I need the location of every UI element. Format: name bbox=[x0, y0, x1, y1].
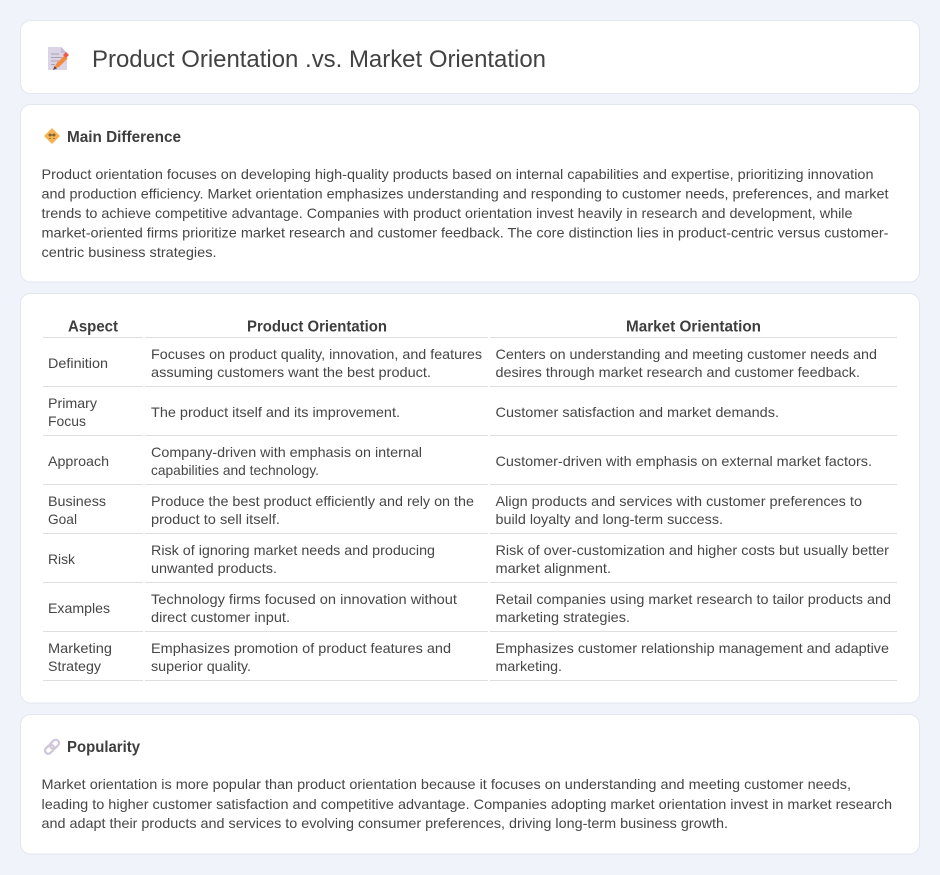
table row: marketing strategy: superior quality. bbox=[151, 658, 251, 674]
table row: risk: unwanted products. bbox=[151, 560, 277, 576]
text block: popularity: leading to higher customer satisfaction and competitive advantage. Companies adopting market orientation invest in market research bbox=[42, 796, 892, 812]
panel: title header bbox=[20, 20, 920, 94]
table row: business goal: product to sell itself. bbox=[151, 511, 280, 527]
table row: risk: Risk bbox=[48, 551, 76, 567]
text block: main difference: centric business strategies. bbox=[42, 244, 216, 260]
table row: examples: marketing strategies. bbox=[496, 609, 630, 625]
heading: main difference: Main Difference bbox=[67, 129, 181, 146]
table row: examples bbox=[43, 591, 897, 632]
table row: marketing strategy bbox=[43, 640, 897, 681]
text block: main difference bbox=[42, 166, 889, 260]
table row: marketing strategy: Emphasizes promotion of product features and bbox=[151, 640, 451, 656]
text block: main difference: trends to achieve competitive advantage. Companies with product orientation invest heavily in research and development, while bbox=[42, 205, 853, 221]
table row: primary focus: Focus bbox=[48, 413, 86, 429]
table row: approach: Approach bbox=[48, 453, 109, 469]
table header: Aspect bbox=[68, 318, 119, 336]
table row: definition: desires through market research and customer feedback. bbox=[496, 364, 860, 380]
table row: business goal: Business bbox=[48, 493, 106, 509]
text block: main difference: and production efficiency. Market orientation emphasizes understanding and responding to customer needs, preferences, and market bbox=[42, 186, 889, 202]
table row: primary focus: Customer satisfaction and market demands. bbox=[496, 404, 779, 420]
table row: definition: Centers on understanding and meeting customer needs and bbox=[496, 346, 877, 362]
table row: approach: Customer-driven with emphasis on external market factors. bbox=[496, 453, 872, 469]
panel: comparison table bbox=[20, 294, 920, 703]
table row: risk: market alignment. bbox=[496, 560, 611, 576]
table row: business goal: Goal bbox=[48, 511, 77, 527]
table row: definition: Focuses on product quality, innovation, and features bbox=[151, 346, 482, 362]
text block: popularity: Market orientation is more popular than product orientation because it focuses on understanding and meeting customer needs, bbox=[42, 776, 851, 792]
table row: examples: Examples bbox=[48, 600, 110, 616]
table row: definition: assuming customers want the best product. bbox=[151, 364, 431, 380]
table header: Product Orientation bbox=[247, 318, 387, 336]
heading: popularity: Popularity bbox=[67, 739, 140, 756]
table row: marketing strategy: marketing. bbox=[496, 658, 562, 674]
table row: definition: Definition bbox=[48, 355, 108, 371]
icon: document with pencil bbox=[48, 47, 69, 70]
table row: primary focus: Primary bbox=[48, 395, 97, 411]
table row: business goal: Produce the best product efficiently and rely on the bbox=[151, 493, 474, 509]
table header: Market Orientation bbox=[626, 318, 761, 336]
table row: marketing strategy: Strategy bbox=[48, 658, 101, 674]
icon: warning diamond bbox=[44, 128, 60, 144]
text block: main difference: market-oriented firms prioritize market research and customer feedback. The core distinction lies in product-centric versus customer- bbox=[42, 224, 889, 240]
table row: examples: Technology firms focused on innovation without bbox=[151, 591, 457, 607]
table row: marketing strategy: Emphasizes customer relationship management and adaptive bbox=[496, 640, 889, 656]
table row: risk: Risk of over-customization and higher costs but usually better bbox=[496, 542, 889, 558]
table row: business goal: Align products and services with customer preferences to bbox=[496, 493, 862, 509]
table row: examples: Retail companies using market research to tailor products and bbox=[496, 591, 891, 607]
table row: business goal bbox=[43, 493, 897, 534]
table row: approach: Company-driven with emphasis on internal bbox=[151, 444, 422, 460]
title: Product Orientation .vs. Market Orientation bbox=[92, 46, 546, 73]
table row: definition bbox=[43, 346, 897, 387]
table header bbox=[43, 318, 897, 338]
table row: risk bbox=[43, 542, 897, 583]
table row: risk: Risk of ignoring market needs and producing bbox=[151, 542, 435, 558]
text block: main difference: Product orientation focuses on developing high-quality products based on internal capabilities and expertise, prioritizing innovation bbox=[42, 166, 874, 182]
text block: popularity: and adapt their products and services to evolving consumer preferences, driving long-term business growth. bbox=[42, 815, 728, 831]
table row: examples: direct customer input. bbox=[151, 609, 290, 625]
table row: approach bbox=[43, 444, 897, 485]
table row: primary focus bbox=[43, 395, 897, 436]
text block: popularity bbox=[42, 776, 892, 831]
table row: approach: capabilities and technology. bbox=[151, 462, 319, 478]
icon: chain link bbox=[44, 738, 60, 755]
panel: main difference bbox=[20, 104, 920, 282]
table row: business goal: build loyalty and long-term success. bbox=[496, 511, 723, 527]
panel: popularity bbox=[20, 714, 920, 854]
table row: primary focus: The product itself and its improvement. bbox=[151, 404, 400, 420]
table row: marketing strategy: Marketing bbox=[48, 640, 112, 656]
